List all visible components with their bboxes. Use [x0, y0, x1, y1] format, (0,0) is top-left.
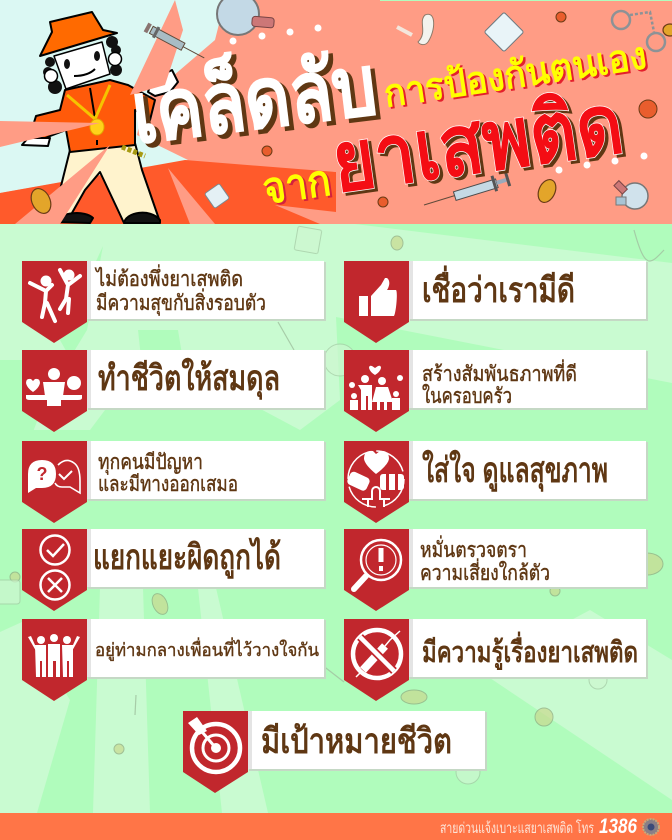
text: หมั่นตรวจตรา — [420, 535, 527, 562]
icon: handcuffs — [612, 11, 665, 51]
card: สร้างสัมพันธภาพที่ดี — [344, 350, 648, 432]
title: ยาเสพติด: ยาเสพติด — [326, 76, 629, 210]
card: มีเป้าหมายชีวิต — [183, 711, 487, 793]
white dots lower — [556, 152, 648, 174]
text: ทุกคนมีปัญหา — [98, 451, 203, 475]
icon: balance person — [26, 368, 82, 406]
icon: small red pills — [262, 12, 657, 207]
text: อยู่ท่ามกลางเพื่อนที่ไว้วางใจกัน — [95, 637, 319, 661]
card: อยู่ท่ามกลางเพื่อนที่ไว้วางใจกัน — [22, 619, 326, 701]
medal — [90, 119, 104, 135]
text: และมีทางออกเสมอ — [98, 473, 238, 496]
icon: powder bag lower — [204, 183, 230, 209]
icon: health — [346, 451, 404, 507]
hat — [40, 12, 117, 56]
title: การป้องกันตนเอง: การป้องกันตนเอง — [383, 37, 652, 118]
face — [64, 51, 100, 69]
text: ทำชีวิตให้สมดุล — [98, 357, 280, 400]
icon: magnifier alert — [354, 540, 401, 589]
card: ไม่ต้องพึ่งยาเสพติด — [22, 261, 326, 343]
card: แยกแยะผิดถูกได้ — [22, 529, 326, 611]
jacket — [28, 80, 155, 152]
title: จาก: จาก — [260, 156, 334, 214]
text: ความเสี่ยงใกล้ตัว — [420, 558, 550, 585]
waist chain — [122, 147, 145, 156]
footer text: สายด่วนแจ้งเบาะแสยาเสพติด โทร — [440, 819, 594, 837]
icon: cigarette — [397, 14, 434, 45]
icon: thumbs up — [359, 278, 397, 316]
emblem — [643, 819, 659, 835]
white dots top — [230, 24, 322, 44]
text: มีความสุขกับสิ่งรอบตัว — [96, 288, 266, 316]
icon: no syringe — [353, 630, 401, 678]
icon: syringe lower — [422, 171, 511, 213]
icon: speech bubbles: ? — [36, 464, 48, 484]
text: ในครอบครัว — [422, 384, 512, 408]
sunburst rays over character — [0, 0, 183, 224]
text: แยกแยะผิดถูกได้ — [93, 536, 281, 579]
title: เคล็ดลับ: เคล็ดลับ — [126, 34, 381, 161]
hair — [43, 36, 122, 94]
pants — [52, 143, 160, 223]
title: เคล็ดลับ: เคล็ดลับ — [131, 37, 386, 164]
card: ใส่ใจ ดูแลสุขภาพ — [344, 441, 648, 523]
icon: pill orange — [27, 24, 672, 217]
header banner — [0, 0, 672, 224]
footer bar — [0, 813, 672, 840]
card: หมั่นตรวจตรา — [344, 529, 648, 611]
icon: powder bag top — [484, 12, 524, 52]
card: เชื่อว่าเรามีดี — [344, 261, 648, 343]
text: ไม่ต้องพึ่งยาเสพติด — [94, 264, 243, 291]
text: มีเป้าหมายชีวิต — [261, 722, 452, 761]
text: เชื่อว่าเรามีดี — [422, 265, 575, 310]
text: สร้างสัมพันธภาพที่ดี — [422, 359, 577, 386]
ears — [44, 70, 58, 82]
text — [94, 264, 266, 316]
title: จาก: จาก — [262, 158, 336, 216]
cartoon character — [22, 12, 178, 223]
card: ทุกคนมีปัญหา — [22, 441, 326, 523]
hotline number: 1386 — [599, 815, 637, 838]
icon: family — [349, 366, 403, 410]
icon: check and cross — [40, 536, 70, 600]
card: มีความรู้เรื่องยาเสพติด — [344, 619, 648, 701]
icon: flask lower — [614, 181, 648, 209]
gold chain — [67, 85, 110, 119]
hands — [148, 70, 178, 96]
icon: flask top — [217, 0, 274, 35]
icon: friends — [28, 634, 80, 677]
shoes — [55, 213, 93, 223]
icon: syringe top — [143, 22, 207, 63]
card: ทำชีวิตให้สมดุล — [22, 350, 326, 432]
title: การป้องกันตนเอง: การป้องกันตนเอง — [381, 35, 649, 116]
icon: jumping people — [30, 270, 80, 321]
jacket seam — [90, 88, 97, 145]
head — [54, 42, 110, 89]
icon: target — [188, 717, 240, 772]
icon: speech bubbles — [28, 460, 80, 493]
title: ยาเสพติด: ยาเสพติด — [330, 79, 632, 212]
